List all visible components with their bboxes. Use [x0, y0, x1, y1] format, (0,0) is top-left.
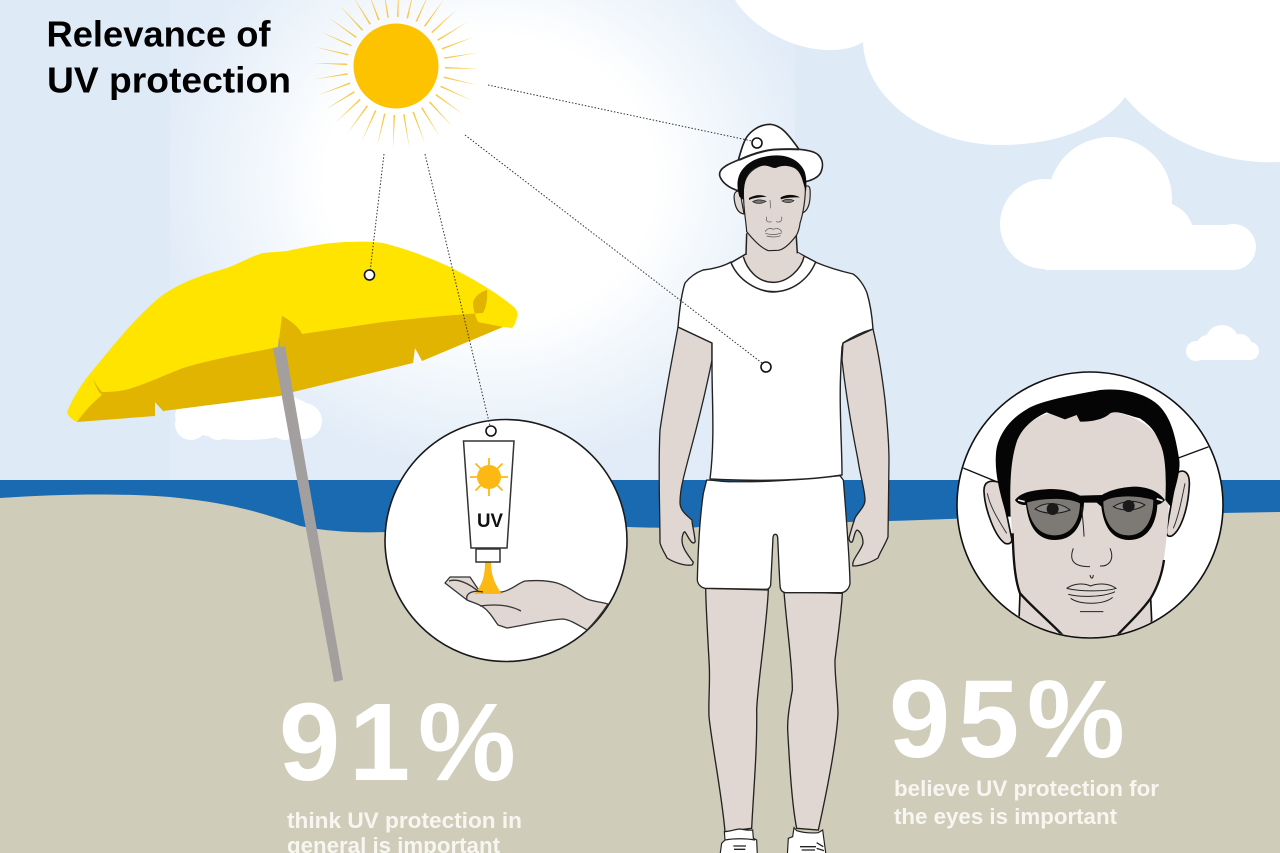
- sunscreen drop: [474, 562, 502, 594]
- nose and mouth lines: [1067, 507, 1116, 612]
- hinge dots: [1018, 499, 1163, 502]
- fingers: [449, 580, 521, 611]
- sand: [0, 494, 1280, 853]
- man figure: [659, 124, 889, 853]
- callout markers: [364, 138, 771, 436]
- eye lines: [1035, 501, 1145, 513]
- sunscreen tube: [464, 441, 514, 548]
- ears: [734, 186, 810, 214]
- frames: [1015, 487, 1165, 540]
- icon: sun: [310, 0, 482, 152]
- neck: [1018, 594, 1152, 637]
- sky background: [0, 0, 1280, 482]
- face: [743, 163, 805, 251]
- ears: [984, 471, 1189, 544]
- shorts: [697, 476, 850, 593]
- right leg: [784, 592, 842, 830]
- shirt collar: [731, 252, 816, 292]
- right arm: [842, 329, 889, 566]
- umbrella shaded underside: [77, 290, 503, 422]
- hat band: [739, 149, 799, 160]
- statistic caption 91%: think UV protection in: [287, 808, 522, 833]
- tube cap: [476, 549, 500, 562]
- neck skin: [743, 232, 804, 282]
- title: [46, 14, 291, 100]
- hair: [737, 155, 806, 200]
- small cloud: [1186, 325, 1259, 361]
- statistic caption 95%: [894, 776, 1159, 829]
- sun glow: [170, 0, 795, 482]
- cloud behind umbrella: [175, 390, 322, 440]
- large cloud top right: [735, 0, 1280, 162]
- statistic: 91%: 91%: [279, 681, 516, 804]
- title: Relevance of: [46, 14, 271, 54]
- statistic: 91%: [279, 681, 522, 853]
- circle: sunscreen: [385, 420, 627, 662]
- statistic: 95%: 95%: [889, 658, 1125, 781]
- pupils: [1047, 500, 1135, 515]
- umbrella: [67, 242, 518, 682]
- statistic caption 95%: the eyes is important: [894, 804, 1118, 829]
- left sock and shoe: [720, 829, 757, 853]
- statistic caption 95%: believe UV protection for: [894, 776, 1159, 801]
- statistic: 95%: [889, 658, 1159, 829]
- hand: [445, 577, 608, 630]
- ear lines: [987, 483, 1185, 533]
- circle: face with sunglasses: [957, 372, 1223, 643]
- hat brim lines: [962, 446, 1211, 482]
- sea: [0, 480, 1280, 540]
- tube label: UV: [477, 511, 503, 532]
- jaw lines: [1013, 533, 1164, 637]
- hat: [720, 124, 822, 191]
- neck and collar lines: [743, 232, 804, 282]
- facial lines: [765, 200, 782, 237]
- left arm: [659, 327, 712, 565]
- callout lines from sun: [370, 85, 762, 426]
- eyes: [753, 199, 794, 203]
- legs and shorts: [697, 476, 850, 853]
- umbrella canopy: [67, 242, 518, 422]
- sunglasses: [1015, 487, 1165, 540]
- eyebrows: [749, 195, 800, 200]
- face: [1010, 410, 1169, 636]
- title: UV protection: [47, 60, 291, 100]
- left leg: [706, 588, 768, 832]
- t-shirt: [678, 262, 873, 480]
- icon: tube sun: [470, 458, 508, 496]
- shoe laces: [725, 839, 824, 851]
- hair: [996, 389, 1180, 517]
- right sock and shoe: [787, 828, 826, 853]
- head and neck: [720, 124, 822, 292]
- statistic caption 91%: [287, 808, 522, 853]
- umbrella pole: [273, 337, 343, 682]
- medium cloud: [1000, 137, 1256, 270]
- lenses: [1027, 496, 1153, 535]
